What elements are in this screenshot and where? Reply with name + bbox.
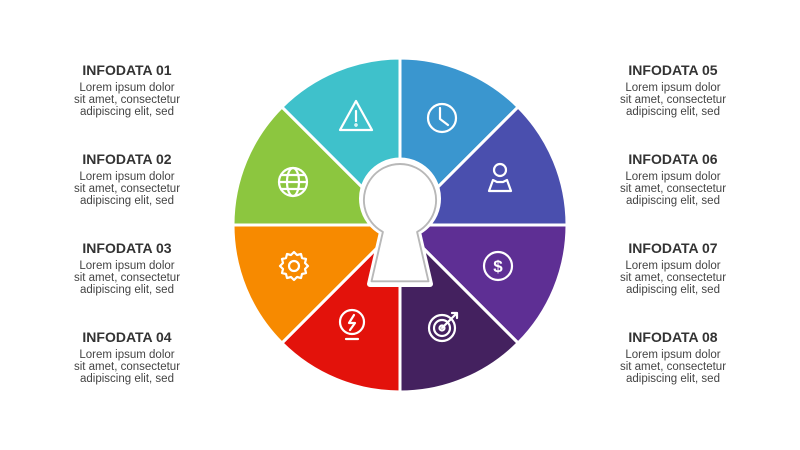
icon: dollar — [484, 252, 512, 280]
text block 08: INFODATA 08 — [628, 329, 718, 345]
segment 02 — [233, 107, 400, 225]
text block 06: Lorem ipsum dolor — [625, 171, 721, 183]
text block 01: adipiscing elit, sed — [80, 106, 174, 118]
text block 04 — [74, 329, 180, 385]
segment 01 — [282, 58, 400, 225]
icon: warning — [340, 101, 372, 130]
segment 03 — [233, 225, 400, 343]
text block 07: sit amet, consectetur — [620, 272, 726, 284]
text block 07 — [620, 240, 726, 296]
text block 03: adipiscing elit, sed — [80, 284, 174, 296]
text block 07: INFODATA 07 — [628, 240, 718, 256]
text block 02: Lorem ipsum dolor — [79, 171, 175, 183]
text block 06: adipiscing elit, sed — [626, 195, 720, 207]
text block 01: sit amet, consectetur — [74, 94, 180, 106]
segment 05 — [400, 58, 518, 225]
text block 04: sit amet, consectetur — [74, 361, 180, 373]
text block 08: sit amet, consectetur — [620, 361, 726, 373]
segment 04 — [282, 225, 400, 392]
text block 08: adipiscing elit, sed — [626, 373, 720, 385]
text block 08: Lorem ipsum dolor — [625, 349, 721, 361]
text block 04: adipiscing elit, sed — [80, 373, 174, 385]
text block 07: Lorem ipsum dolor — [625, 260, 721, 272]
text block 04: INFODATA 04 — [82, 329, 172, 345]
keyhole — [362, 161, 438, 284]
text block 06: INFODATA 06 — [628, 151, 718, 167]
text block 06 — [620, 151, 726, 207]
icon: globe — [279, 168, 307, 196]
text block 01 — [74, 62, 180, 118]
text block 01: INFODATA 01 — [82, 62, 172, 78]
text block 02: sit amet, consectetur — [74, 183, 180, 195]
text block 05: adipiscing elit, sed — [626, 106, 720, 118]
text block 05 — [620, 62, 726, 118]
icon: person map — [489, 164, 511, 191]
text block 03: Lorem ipsum dolor — [79, 260, 175, 272]
icon: gear — [280, 252, 308, 280]
text block 05: sit amet, consectetur — [620, 94, 726, 106]
text block 07: adipiscing elit, sed — [626, 284, 720, 296]
text block 02 — [74, 151, 180, 207]
segment 06 — [400, 107, 567, 225]
text block 04: Lorem ipsum dolor — [79, 349, 175, 361]
text block 03: sit amet, consectetur — [74, 272, 180, 284]
text block 01: Lorem ipsum dolor — [79, 82, 175, 94]
text block 05: INFODATA 05 — [628, 62, 718, 78]
icon: bulb — [340, 310, 364, 339]
icon: dollar: $ — [493, 257, 503, 276]
icon: clock — [428, 104, 456, 132]
text block 06: sit amet, consectetur — [620, 183, 726, 195]
text block 02: INFODATA 02 — [82, 151, 172, 167]
text block 02: adipiscing elit, sed — [80, 195, 174, 207]
segment 07 — [400, 225, 567, 343]
segment 08 — [400, 225, 518, 392]
text block 08 — [620, 329, 726, 385]
icon: target — [429, 313, 457, 341]
text block 05: Lorem ipsum dolor — [625, 82, 721, 94]
text block 03: INFODATA 03 — [82, 240, 172, 256]
text block 03 — [74, 240, 180, 296]
